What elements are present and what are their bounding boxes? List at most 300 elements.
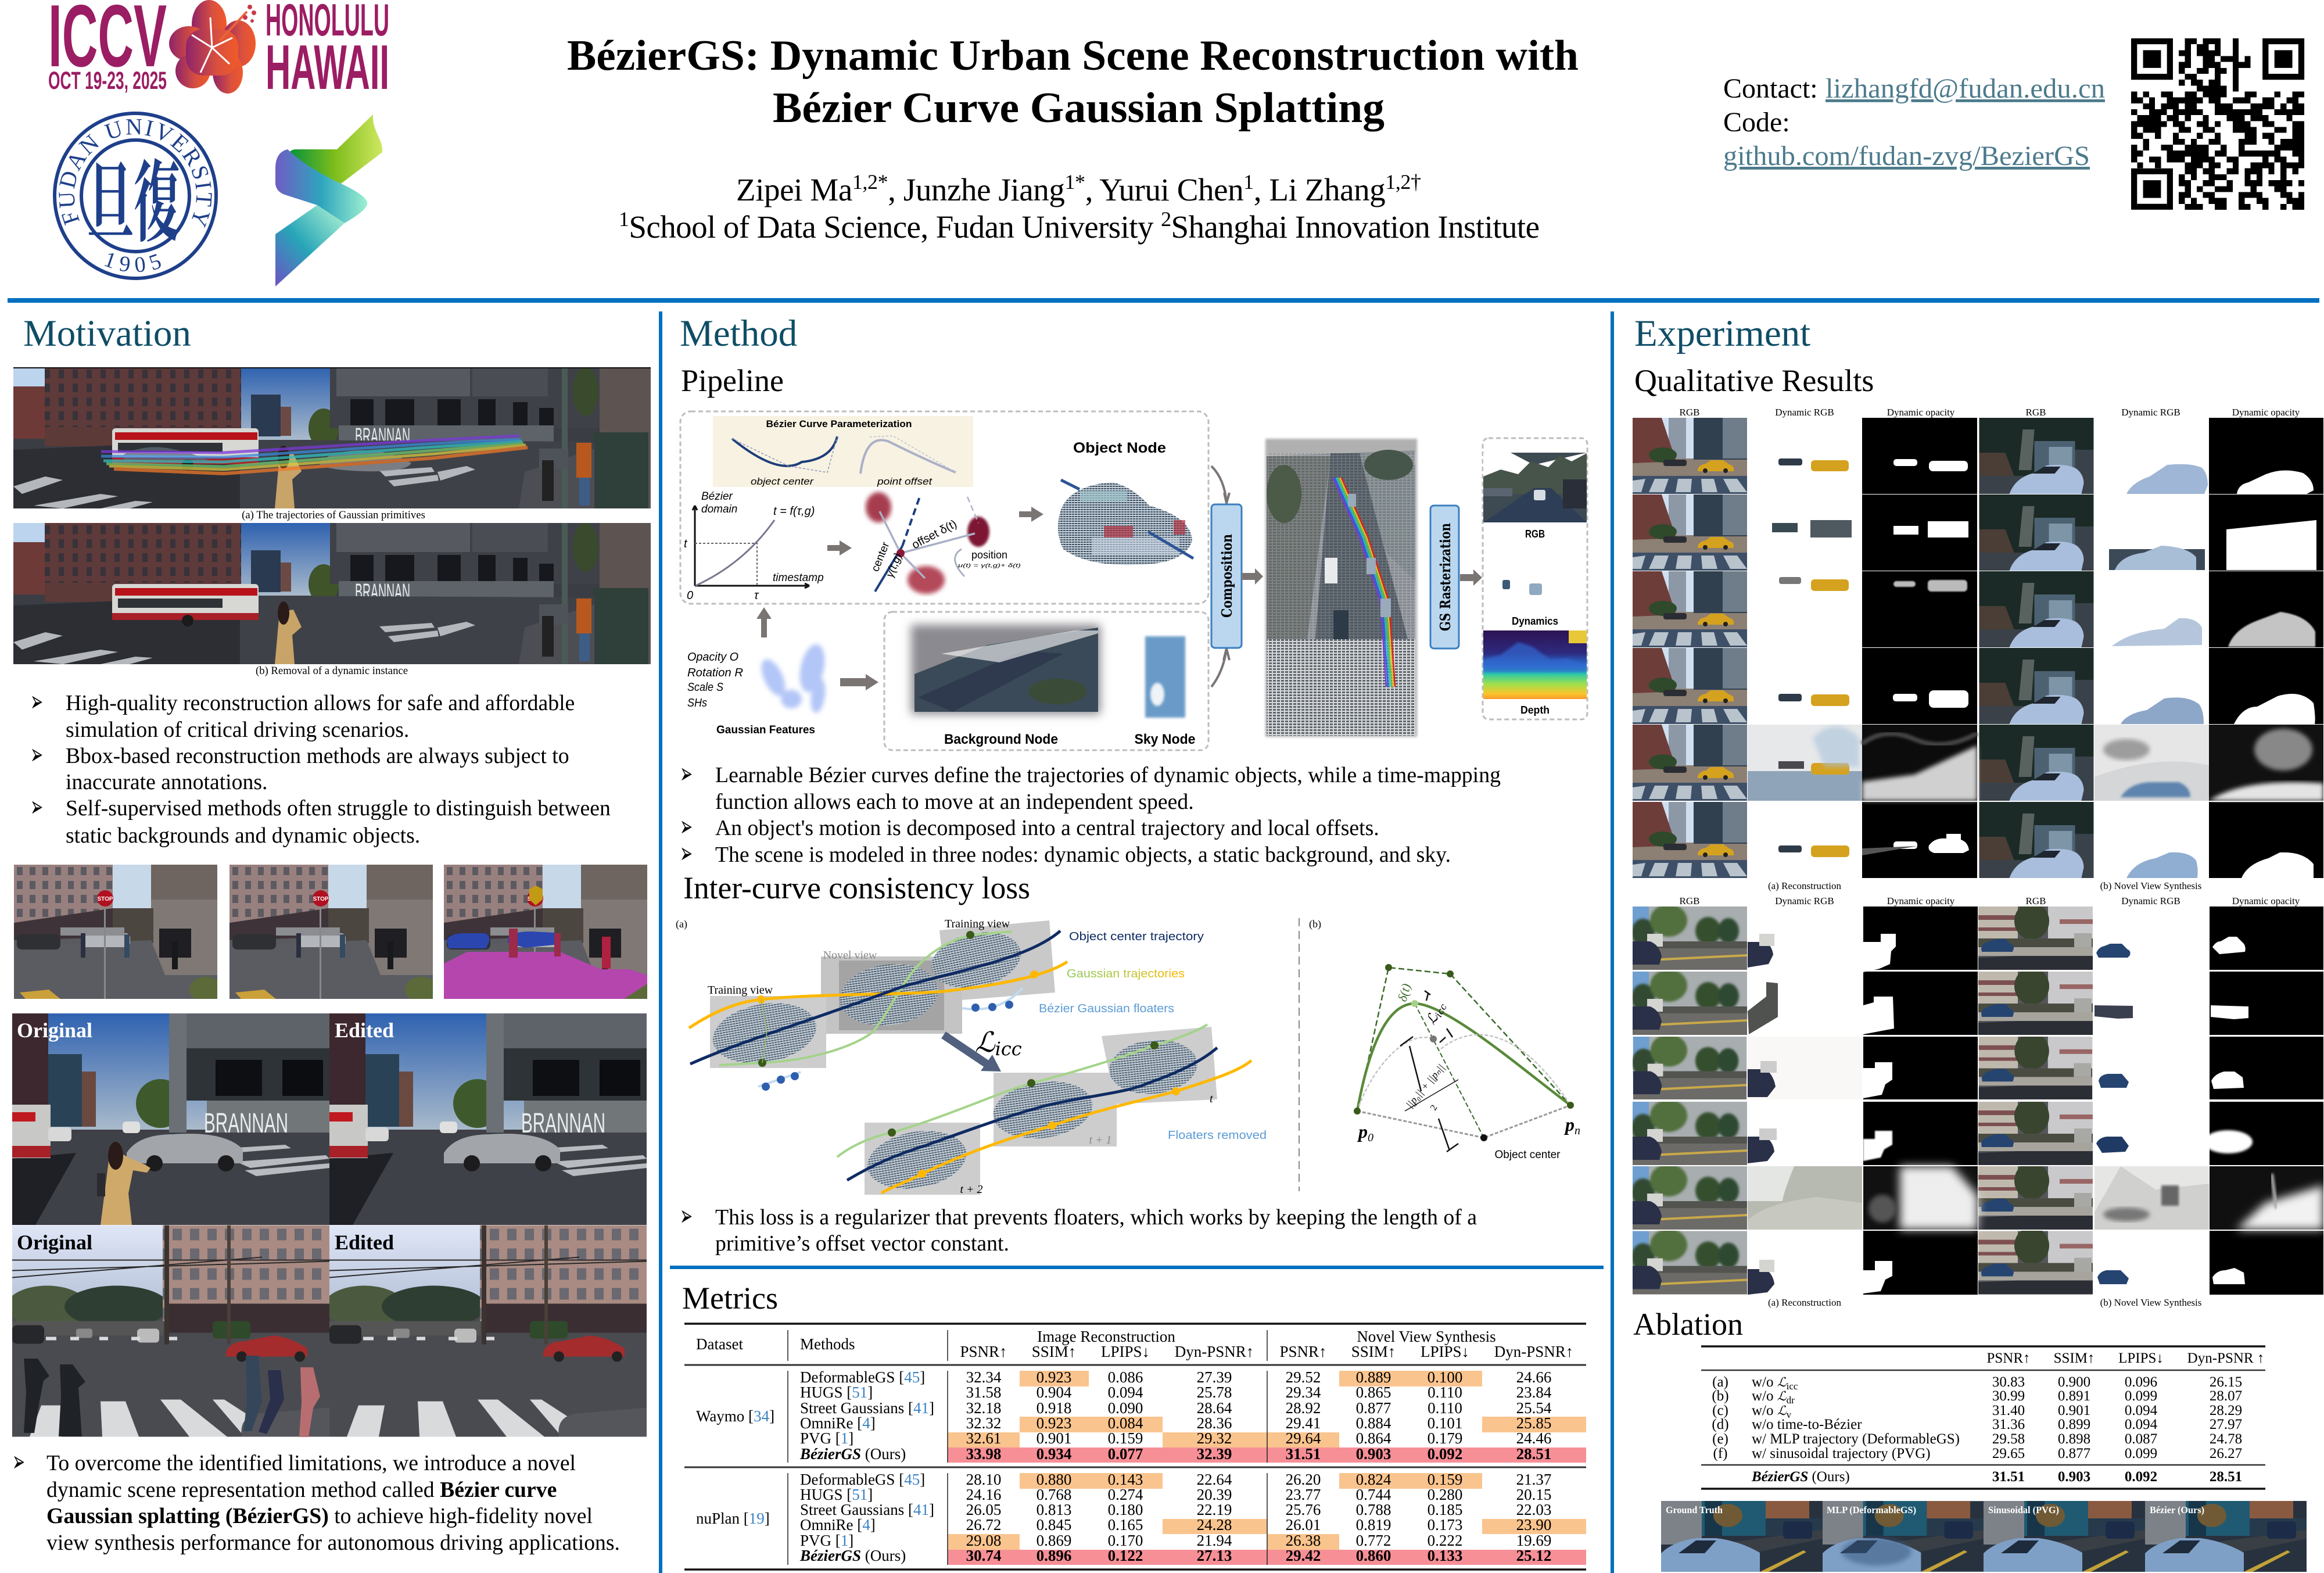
title: BézierGS: Dynamic Urban Scene Reconstruction with	[567, 32, 1579, 80]
nuPlan rows: 0.744	[1356, 1486, 1391, 1503]
loss arrow: icc	[995, 1038, 1022, 1060]
table: ablation: (c)	[1712, 1403, 1728, 1418]
table: ablation: 30.99	[1992, 1388, 2025, 1404]
nuPlan rows: 0.768	[1037, 1486, 1071, 1503]
scene point cloud with rainbow trajectories	[1265, 439, 1417, 737]
nuPlan rows: 0.824	[1356, 1471, 1391, 1488]
table: ablation: SSIM↑	[2054, 1350, 2095, 1366]
trajectories upper	[689, 931, 1067, 1065]
column labels: Dynamic opacity	[1887, 407, 1955, 418]
header row: Methods	[800, 1335, 855, 1353]
header row	[696, 1328, 1573, 1360]
Waymo rows: 29.64	[1286, 1429, 1321, 1447]
table: ablation: 27.97	[2210, 1417, 2242, 1432]
table: ablation: (e)	[1712, 1431, 1728, 1447]
table: ablation: PSNR↑	[1986, 1350, 2031, 1366]
Waymo rows: 25.78	[1197, 1384, 1232, 1401]
nuPlan rows: 0.133	[1428, 1547, 1462, 1564]
authors: 1,2*	[852, 170, 888, 194]
authors: 1*	[1064, 170, 1085, 194]
table: ablation: w/o ℒ	[1752, 1374, 1787, 1390]
affiliations: School of Data Science, Fudan University	[629, 209, 1161, 245]
time mapping plot	[684, 490, 824, 602]
time mapping plot: t	[684, 538, 688, 550]
figure (a): inter-curve loss: Object center trajectory	[1069, 930, 1204, 943]
bullet list: method: function allows each to move at an independent speed.	[715, 790, 1194, 814]
heading: Inter-curve consistency loss: Inter-curve consistency loss	[683, 870, 1030, 905]
header row: Dyn-PSNR↑	[1175, 1343, 1254, 1360]
nuPlan rows: 21.37	[1516, 1471, 1551, 1488]
table: ablation: 0.903	[2058, 1469, 2090, 1485]
figure (b): loss geometry: Object center	[1494, 1149, 1561, 1161]
arrow between cloud and rasterization	[1460, 569, 1482, 586]
arrow	[827, 540, 852, 556]
captions: (b) Novel View Synthesis	[2100, 1297, 2201, 1308]
Waymo rows: 0.094	[1108, 1384, 1143, 1401]
header row: Dataset	[696, 1335, 743, 1353]
Waymo rows: DeformableGS [45]	[800, 1368, 925, 1386]
authors: , Li Zhang	[1254, 172, 1386, 207]
Waymo rows: 0.901	[1037, 1429, 1071, 1447]
contact block	[1723, 73, 2105, 171]
table: ablation: icc	[1787, 1381, 1798, 1392]
nuPlan rows: 0.280	[1428, 1486, 1462, 1503]
Waymo rows: Street Gaussians [41]	[800, 1399, 934, 1417]
Waymo rows: 32.61	[966, 1429, 1001, 1447]
Waymo rows: 28.36	[1197, 1414, 1232, 1432]
dashed divider in figure	[1299, 918, 1300, 1191]
bullet list: method: An object's motion is decomposed into a central trajectory and local offsets.	[715, 816, 1379, 840]
table: ablation: 0.900	[2058, 1374, 2090, 1390]
figure (a): inter-curve loss: Novel view	[823, 949, 877, 962]
figure (b): loss geometry: 0	[1368, 1131, 1373, 1144]
nuPlan rows: 26.72	[966, 1516, 1001, 1533]
header rule	[8, 298, 2319, 303]
Waymo rows: 0.934	[1037, 1445, 1071, 1463]
header row: PSNR↑	[960, 1343, 1007, 1360]
Waymo rows: 28.51	[1516, 1445, 1551, 1463]
table: ablation: 26.15	[2210, 1374, 2242, 1390]
photos: stop sign scene original, edit, segmentation	[14, 865, 652, 1002]
nuPlan rows: 25.12	[1516, 1547, 1551, 1564]
nuPlan rows: 0.173	[1428, 1516, 1462, 1533]
figure (a): inter-curve loss: Gaussian trajectories	[1067, 968, 1185, 980]
arrow up	[756, 607, 772, 637]
Gaussian Features: Gaussian Features	[716, 724, 815, 736]
nuPlan rows: 20.15	[1516, 1486, 1551, 1503]
bullet: contribution statement: view synthesis performance for autonomous driving applications.	[46, 1531, 620, 1555]
contact block: lizhangfd@fudan.edu.cn	[1826, 73, 2105, 104]
nuPlan rows: 26.01	[1286, 1516, 1321, 1533]
affiliations: 1	[619, 207, 629, 231]
bullet: contribution statement: dynamic scene representation method called Bézier curve	[46, 1478, 557, 1502]
Object Node car point cloud: Object Node	[1073, 440, 1166, 456]
nuPlan rows: 23.90	[1516, 1516, 1551, 1533]
table: ablation: 30.83	[1992, 1374, 2025, 1390]
nuPlan rows: 0.845	[1037, 1516, 1071, 1533]
photo comparison: original vs edited, Brannan street	[12, 1013, 647, 1225]
Waymo rows: 0.923	[1037, 1368, 1071, 1386]
bullet list: motivation: Bbox-based reconstruction methods are always subject to	[66, 744, 569, 768]
dynamic RGB novel view column	[2095, 944, 2209, 1284]
authors: 1	[1243, 170, 1254, 194]
column labels: Dynamic opacity	[1887, 895, 1955, 906]
nuPlan rows: 0.159	[1428, 1471, 1462, 1488]
nuPlan rows: 0.180	[1108, 1501, 1143, 1518]
figure (a): inter-curve loss: Floaters removed	[1168, 1129, 1267, 1142]
nuPlan rows: 0.819	[1356, 1516, 1391, 1533]
time mapping plot: domain	[701, 503, 737, 515]
logo: Shanghai Innovation Institute ribbon	[275, 114, 382, 286]
bullet list: method: ➢	[680, 810, 693, 843]
photo comparison: original vs edited, crosswalk	[6, 1225, 647, 1437]
nuPlan rows	[696, 1471, 1551, 1564]
table: ablation: 31.51	[1992, 1469, 2025, 1485]
output RGB: RGB	[1525, 528, 1545, 540]
Waymo rows: OmniRe [4]	[800, 1414, 876, 1432]
column labels: RGB	[2026, 895, 2046, 906]
header row: LPIPS↓	[1421, 1343, 1469, 1360]
view frames	[710, 920, 1217, 1195]
bullet list: motivation: simulation of critical driving scenarios.	[66, 718, 409, 742]
trajectories lower	[837, 1024, 1251, 1193]
heading: Method: Method	[680, 313, 797, 354]
nuPlan rows: 0.222	[1428, 1532, 1462, 1549]
Bezier curve parameterization box: object center	[751, 476, 814, 487]
dynamic RGB reconstruction column	[1748, 934, 1862, 1295]
bullet: contribution statement: ➢	[12, 1445, 25, 1478]
Waymo rows: 32.32	[966, 1414, 1001, 1432]
column labels: RGB	[2026, 407, 2046, 418]
Waymo rows: 23.84	[1516, 1384, 1552, 1401]
nuPlan rows: 0.869	[1037, 1532, 1071, 1549]
floaters	[758, 988, 1023, 1091]
figure (a): inter-curve loss: t	[1210, 1092, 1213, 1105]
header: ICCV logo: OCT 19-23, 2025	[48, 67, 167, 95]
Gaussian Features	[687, 642, 829, 736]
Waymo rows: 0.090	[1108, 1399, 1143, 1417]
nuPlan rows: HUGS [51]	[800, 1486, 873, 1503]
figure (b): loss geometry: 2	[1429, 1103, 1439, 1112]
RGB columns	[1633, 418, 2094, 878]
person removed in the edited view	[97, 1142, 150, 1225]
nuPlan rows: 22.64	[1197, 1471, 1232, 1488]
Waymo rows: 0.179	[1428, 1429, 1462, 1447]
figure: trajectories of Gaussian primitives	[13, 367, 651, 508]
Waymo rows: 24.46	[1516, 1429, 1551, 1447]
Bezier curve parameterization box	[713, 416, 973, 487]
logo: Fudan University seal: 復	[134, 132, 180, 259]
table: ablation: LPIPS↓	[2118, 1350, 2164, 1366]
Waymo rows: 0.101	[1428, 1414, 1462, 1432]
nuPlan rows: 19.69	[1516, 1532, 1551, 1549]
nuPlan rows: 0.185	[1428, 1501, 1462, 1518]
nuPlan rows: 0.896	[1037, 1547, 1071, 1564]
Waymo rows: 0.923	[1037, 1414, 1071, 1432]
contact block: Code:	[1723, 107, 1790, 138]
nuPlan rows: 29.08	[966, 1532, 1001, 1549]
output dashed panel	[1483, 438, 1587, 719]
Waymo rows: 0.889	[1356, 1368, 1391, 1386]
Waymo rows: PVG [1]	[800, 1429, 853, 1447]
figure (b): loss geometry: ||p₀|| + ||pₙ||	[1404, 1062, 1447, 1110]
Bezier curve parameterization box: point offset	[877, 476, 933, 487]
Waymo rows: 0.092	[1428, 1445, 1462, 1463]
table: ablation	[1701, 1346, 2265, 1489]
column labels: Dynamic RGB	[1775, 407, 1834, 418]
Waymo rows: 33.98	[966, 1445, 1001, 1463]
table: ablation: 0.899	[2058, 1417, 2090, 1432]
Waymo rows: 0.084	[1108, 1414, 1143, 1432]
contact block: Contact:	[1723, 73, 1818, 104]
dynamic opacity reconstruction column	[1863, 906, 1978, 1295]
nuPlan rows: PVG [1]	[800, 1532, 853, 1549]
table: ablation: 0.898	[2058, 1431, 2090, 1447]
nuPlan rows: 27.13	[1197, 1547, 1232, 1564]
bullet list: method: Learnable Bézier curves define the trajectories of dynamic objects, while a time-mapping	[715, 763, 1501, 787]
nuPlan rows: 20.39	[1197, 1486, 1232, 1503]
header row: PSNR↑	[1279, 1343, 1327, 1360]
nuPlan rows: Street Gaussians [41]	[800, 1501, 934, 1518]
title: Bézier Curve Gaussian Splatting	[773, 84, 1385, 132]
Waymo rows: 0.100	[1428, 1368, 1462, 1386]
bullet: contribution statement	[12, 1445, 620, 1555]
figure: removal of a dynamic instance	[13, 523, 651, 664]
photo comparison: original vs edited, crosswalk: Original	[17, 1231, 92, 1254]
header row: Novel View Synthesis	[1357, 1328, 1496, 1345]
table: ablation: 0.891	[2058, 1388, 2090, 1404]
Waymo rows: 29.34	[1286, 1384, 1321, 1401]
bullet: contribution statement: Gaussian splatting (BézierGS) to achieve high-fidelity novel	[46, 1504, 593, 1528]
column labels: Dynamic opacity	[2232, 407, 2300, 418]
table: ablation: 31.40	[1992, 1403, 2025, 1418]
bullet list: motivation: inaccurate annotations.	[66, 770, 267, 794]
Waymo rows: BézierGS (Ours)	[799, 1445, 906, 1463]
nuPlan rows: 26.38	[1286, 1532, 1321, 1549]
nuPlan rows: 22.19	[1197, 1501, 1232, 1518]
bullet list: method	[680, 757, 1501, 870]
dynamic opacity novel view column	[2204, 906, 2323, 1295]
time mapping plot: t = f(τ,g)	[773, 505, 815, 518]
table: ablation: 0.901	[2058, 1403, 2090, 1418]
column labels: Dynamic opacity	[2232, 895, 2300, 906]
figure (a): inter-curve loss: t + 2	[960, 1183, 983, 1196]
panel: Motivation	[6, 313, 652, 1555]
column labels: Dynamic RGB	[2121, 407, 2180, 418]
authors: , Junzhe Jiang	[888, 172, 1065, 207]
captions	[1768, 1297, 2201, 1308]
nuPlan rows: 30.74	[966, 1547, 1001, 1564]
time mapping plot: Bézier	[701, 490, 733, 503]
QR code	[2131, 38, 2304, 210]
table: ablation: 0.094	[2125, 1417, 2158, 1432]
highlighted cells	[948, 1371, 1586, 1565]
nuPlan rows: 0.170	[1108, 1532, 1143, 1549]
Waymo rows: 0.918	[1037, 1399, 1071, 1417]
heading: Ablation: Ablation	[1633, 1307, 1743, 1342]
Bezier curve parameterization box: Bézier Curve Parameterization	[766, 418, 912, 429]
table: metrics	[684, 1324, 1586, 1570]
Waymo rows: 29.41	[1286, 1414, 1321, 1432]
bullet list: method: The scene is modeled in three nodes: dynamic objects, a static background, and sky.	[715, 843, 1451, 867]
nuPlan rows: DeformableGS [45]	[800, 1471, 925, 1488]
figure (b): loss geometry: ℒ	[1423, 1011, 1441, 1027]
nuPlan rows: 0.165	[1108, 1516, 1143, 1533]
logo: Fudan University seal: FUDAN UNIVERSITY	[59, 119, 212, 228]
table: ablation: 28.07	[2210, 1388, 2242, 1404]
output Depth: Depth	[1520, 704, 1550, 716]
pipeline diagram	[680, 411, 1587, 750]
time mapping plot: τ	[754, 589, 759, 602]
Waymo rows: 0.904	[1037, 1384, 1072, 1401]
nuPlan rows: 0.772	[1356, 1532, 1391, 1549]
Waymo rows: 32.34	[966, 1368, 1002, 1386]
photo comparison: original vs edited, Brannan street: Original	[17, 1019, 92, 1042]
header row: Image Reconstruction	[1037, 1328, 1175, 1345]
captions: (a) Reconstruction	[1768, 1297, 1842, 1308]
figure (b): loss geometry: (b)	[1309, 918, 1321, 930]
Gaussian offset diagram: μ(t) = γ(t,g)+ δ(t)	[957, 562, 1021, 568]
pedestrians removed in the edited view	[24, 1356, 320, 1437]
ablation image strip	[1661, 1501, 2307, 1572]
figure (b): loss geometry: icc	[1433, 1002, 1449, 1019]
column labels: Dynamic RGB	[1775, 895, 1834, 906]
arrow	[1242, 568, 1263, 585]
Sky Node: Sky Node	[1134, 732, 1196, 747]
table: ablation: 28.29	[2210, 1403, 2242, 1418]
table: ablation: w/o ℒ	[1752, 1388, 1787, 1404]
Object Node car point cloud	[1058, 440, 1193, 565]
nuPlan rows: 23.77	[1286, 1486, 1321, 1503]
ablation image strip: Ground Truth	[1666, 1504, 1723, 1515]
contact block: github.com/fudan-zvg/BezierGS	[1723, 141, 2090, 171]
nuPlan rows: 28.10	[966, 1471, 1001, 1488]
table: ablation: 24.78	[2210, 1431, 2242, 1447]
Waymo rows: 0.884	[1356, 1414, 1391, 1432]
bullet list: motivation: ➢	[30, 738, 43, 771]
Waymo rows: 0.877	[1356, 1399, 1391, 1417]
captions: (b) Novel View Synthesis	[2100, 880, 2201, 891]
nuPlan rows: 0.813	[1037, 1501, 1071, 1518]
figure (a): inter-curve loss: Bézier Gaussian floaters	[1039, 1002, 1174, 1015]
nuPlan rows: 26.20	[1286, 1471, 1321, 1488]
nuPlan rows: 0.274	[1108, 1486, 1143, 1503]
nuPlan rows: 24.16	[966, 1486, 1001, 1503]
table: ablation: BézierGS (Ours)	[1751, 1469, 1850, 1485]
RGB columns	[1631, 902, 2093, 1295]
captions: (a) Reconstruction	[1768, 880, 1842, 891]
Composition block: Composition	[1218, 534, 1235, 618]
heading: Motivation: Motivation	[23, 313, 191, 354]
panel: Method	[670, 313, 1604, 1570]
figure (a): inter-curve loss: Training view	[708, 984, 773, 997]
bullet list: method: ➢	[680, 837, 693, 870]
ablation image strip: Sinusoidal (PVG)	[1988, 1504, 2059, 1515]
heading: Pipeline: Pipeline	[681, 363, 784, 398]
Waymo rows: 32.39	[1197, 1445, 1232, 1463]
table: ablation: (b)	[1712, 1388, 1729, 1404]
table: ablation: (f)	[1713, 1446, 1727, 1461]
table: ablation: 31.36	[1992, 1417, 2025, 1432]
dynamic RGB reconstruction column	[1748, 458, 1862, 857]
Waymo rows: 31.58	[966, 1384, 1001, 1401]
GS Rasterization block: GS Rasterization	[1437, 523, 1454, 631]
Waymo rows: 31.51	[1286, 1445, 1321, 1463]
heading: Metrics: Metrics	[682, 1281, 778, 1316]
bullet: loss explanation: ➢	[680, 1199, 693, 1232]
table: ablation: 0.092	[2125, 1469, 2157, 1485]
object node dashed panel	[680, 411, 1208, 604]
nuPlan rows: 25.76	[1286, 1501, 1321, 1518]
affiliations: Shanghai Innovation Institute	[1171, 209, 1540, 245]
Gaussian Features: Opacity O	[687, 651, 738, 664]
Gaussian offset diagram: center	[869, 540, 892, 574]
Waymo rows: 0.086	[1108, 1368, 1143, 1386]
table: ablation: 0.099	[2125, 1446, 2157, 1461]
Background Node point cloud	[911, 625, 1100, 747]
header row: SSIM↑	[1351, 1343, 1396, 1360]
lower dashed panel	[884, 612, 1208, 750]
Composition block	[1211, 504, 1242, 648]
table: ablation: 0.087	[2125, 1431, 2157, 1447]
table: ablation: 0.877	[2058, 1446, 2090, 1461]
heading: Experiment: Experiment	[1634, 313, 1810, 354]
column divider right	[1611, 311, 1614, 1573]
metrics rule	[670, 1266, 1604, 1269]
Waymo rows: 0.077	[1108, 1445, 1143, 1463]
dynamic opacity novel view column	[2209, 418, 2323, 878]
header row: LPIPS↓	[1101, 1343, 1150, 1360]
header row: Dyn-PSNR↑	[1494, 1343, 1573, 1360]
bullet: loss explanation: This loss is a regularizer that prevents floaters, which works by keeping the length of a	[715, 1205, 1477, 1230]
nuPlan rows: 0.860	[1356, 1547, 1391, 1564]
Waymo rows: 25.54	[1516, 1399, 1552, 1417]
heading: Qualitative Results: Qualitative Results	[1634, 363, 1874, 398]
table: ablation: w/o time-to-Bézier	[1752, 1417, 1862, 1432]
time mapping plot: timestamp	[773, 572, 824, 584]
nuPlan rows: 0.122	[1108, 1547, 1143, 1564]
Waymo rows: 27.39	[1197, 1368, 1232, 1386]
Waymo rows: HUGS [51]	[800, 1384, 873, 1401]
bullet: loss explanation: primitive’s offset vector constant.	[715, 1231, 1009, 1256]
title	[567, 32, 1579, 132]
figure (a): inter-curve loss: (a)	[676, 918, 687, 930]
caption (a): (a) The trajectories of Gaussian primitives	[242, 509, 425, 521]
panel: Experiment	[1631, 313, 2323, 1572]
figure (b): loss geometry: δ(t)	[1395, 982, 1414, 1003]
table: ablation: 0.096	[2125, 1374, 2157, 1390]
Waymo rows: 25.85	[1516, 1414, 1551, 1432]
table: ablation: 26.27	[2210, 1446, 2242, 1461]
Gaussian offset diagram: offset δ(t)	[910, 517, 959, 551]
Waymo rows: 28.64	[1197, 1399, 1232, 1417]
authors: 1,2†	[1385, 170, 1421, 194]
figure (a): inter-curve loss: t + 1	[1089, 1134, 1112, 1146]
bullet: contribution statement: To overcome the identified limitations, we introduce a novel	[46, 1451, 576, 1475]
photo comparison: original vs edited, crosswalk: Edited	[335, 1231, 394, 1254]
table: ablation: 28.51	[2210, 1469, 2242, 1485]
arrow	[1019, 507, 1043, 522]
Waymo rows: 0.864	[1356, 1429, 1391, 1447]
column labels: RGB	[1680, 407, 1699, 418]
ablation image strip: MLP (DeformableGS)	[1827, 1504, 1916, 1515]
time mapping plot: 0	[687, 589, 693, 602]
column labels: Dynamic RGB	[2121, 895, 2180, 906]
table: ablation: 29.58	[1992, 1431, 2025, 1447]
results grid 1: taxi and silver car	[1633, 407, 2323, 891]
loss arrow	[944, 1026, 1022, 1072]
arrow	[840, 674, 878, 690]
